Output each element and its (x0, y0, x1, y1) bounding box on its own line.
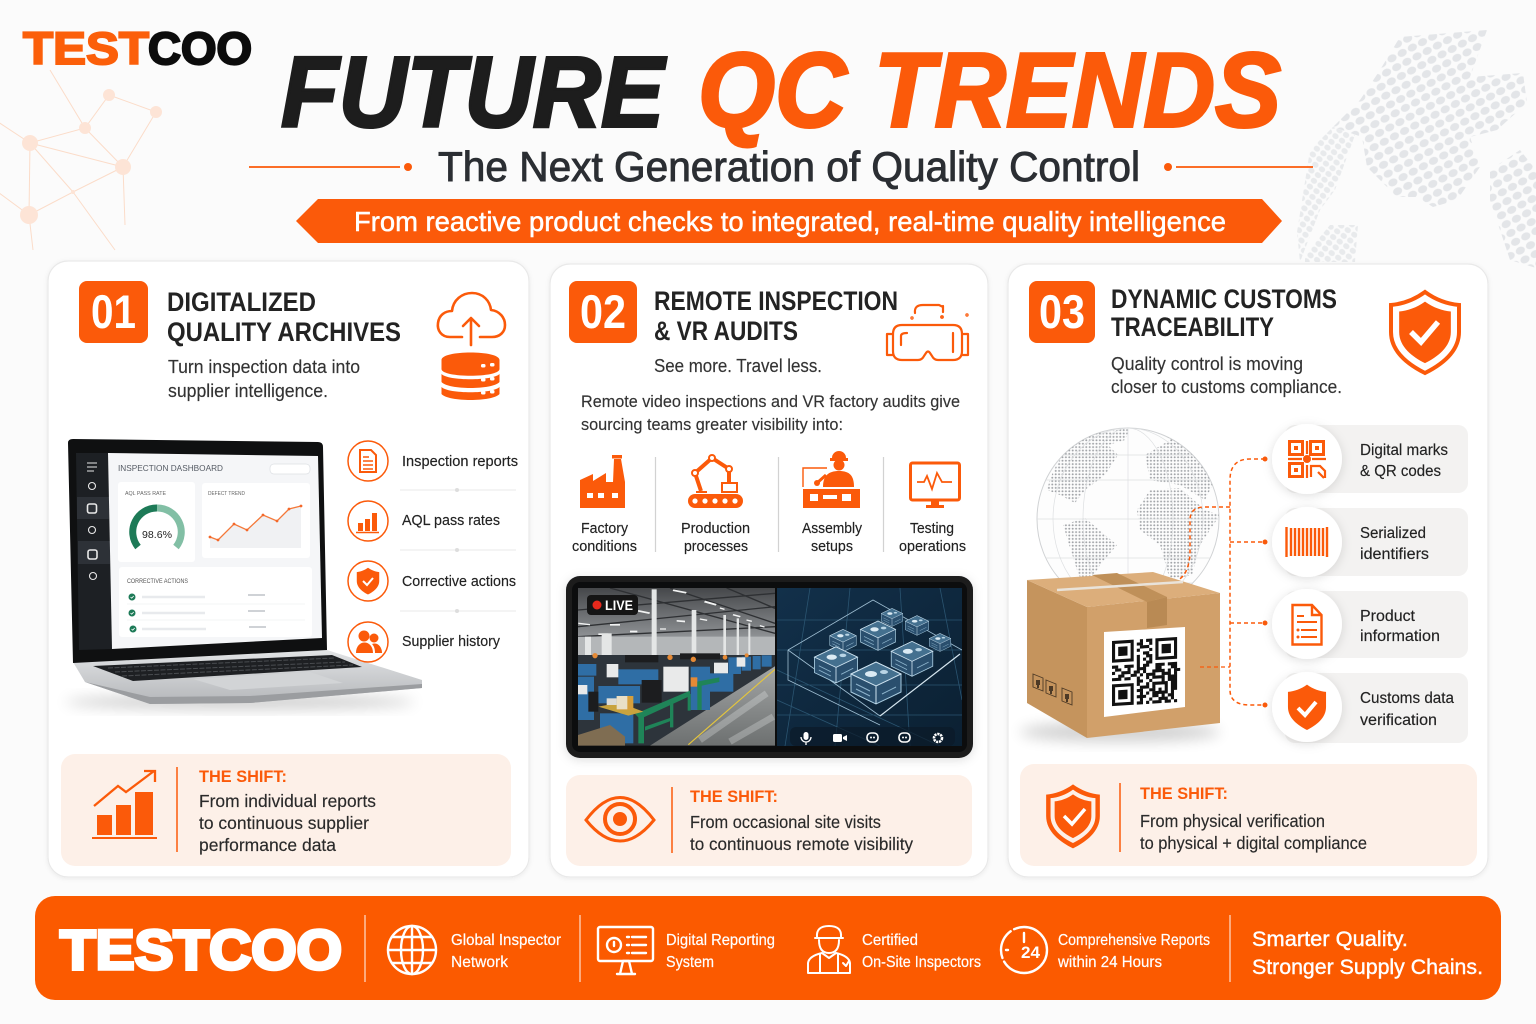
banner tagline (296, 199, 1282, 243)
logo: TEST (23, 23, 149, 74)
logo: COO (148, 23, 252, 74)
description: Quality control is moving (1111, 354, 1303, 374)
feature: digital marks and QR codes: & QR codes (1360, 463, 1441, 480)
tagline: See more. Travel less. (654, 356, 822, 376)
heading: TRACEABILITY (1111, 312, 1274, 342)
item: factory conditions: conditions (572, 539, 637, 555)
footer slogan (1252, 928, 1483, 979)
heading: REMOTE INSPECTION (654, 286, 898, 316)
footer item: 24 hour reports (1001, 927, 1210, 973)
heading: QUALITY ARCHIVES (167, 317, 401, 347)
item: testing operations: Testing (910, 521, 954, 537)
icon: database (442, 352, 500, 400)
item: factory conditions (572, 455, 637, 555)
shift callout 3: to physical + digital compliance (1140, 833, 1367, 853)
globe (1037, 428, 1220, 610)
feature: serialized identifiers: identifiers (1360, 546, 1429, 563)
feature: product information: information (1360, 628, 1440, 645)
live badge: LIVE (605, 598, 633, 613)
shift callout 1: performance data (199, 835, 336, 855)
QR code (1112, 638, 1180, 705)
feature: product information: Product (1360, 608, 1416, 625)
number badge 01 (79, 281, 148, 343)
laptop with inspection dashboard: INSPECTION DASHBOARD (118, 463, 223, 473)
panel: dynamic customs traceability (1008, 264, 1488, 877)
icon: VR headset (887, 305, 968, 360)
shift callout 1 (61, 754, 511, 866)
footer item: certified inspectors: Certified (862, 932, 918, 949)
shift callout 3: From physical verification (1140, 811, 1325, 831)
title: QC TRENDS (698, 32, 1281, 150)
intro paragraph: Remote video inspections and VR factory audits give (581, 392, 960, 411)
feature: customs data verification (1272, 672, 1468, 743)
icon: shield solid (1046, 784, 1100, 848)
item: assembly setups: setups (811, 539, 853, 555)
footer item: global network (388, 926, 562, 974)
live badge (587, 595, 638, 615)
checklist: AQL pass rates (348, 501, 500, 541)
banner tagline: From reactive product checks to integrated, real-time quality intelligence (354, 206, 1226, 237)
footer slogan: Smarter Quality. (1252, 928, 1408, 951)
description (1111, 354, 1342, 397)
checklist: inspection reports (348, 441, 518, 481)
panel: remote inspection and VR audits (550, 264, 988, 877)
feature: digital marks and QR codes (1272, 424, 1468, 494)
background globe pattern (1297, 30, 1536, 268)
description: closer to customs compliance. (1111, 377, 1342, 397)
checklist: inspection reports: Inspection reports (402, 454, 518, 470)
dashed connectors (1178, 459, 1265, 705)
footer item: digital reporting: Digital Reporting (666, 932, 775, 949)
laptop with inspection dashboard: 98.6% (142, 529, 172, 541)
item: production processes: Production (681, 521, 750, 537)
shift callout 3: THE SHIFT: (1140, 784, 1228, 803)
logo (23, 23, 252, 74)
number badge 03: 03 (1039, 285, 1085, 338)
gauge (133, 508, 181, 547)
item: production processes (681, 455, 750, 555)
heading: & VR AUDITS (654, 316, 798, 346)
checklist: corrective actions: Corrective actions (402, 574, 516, 590)
tablet video call (566, 576, 973, 758)
feature: customs data verification: verification (1360, 712, 1437, 729)
feature: serialized identifiers: Serialized (1360, 525, 1426, 542)
icon: eye (586, 798, 654, 841)
checklist: supplier history: Supplier history (402, 634, 501, 650)
footer item: digital reporting (598, 927, 775, 974)
title: FUTURE (281, 36, 667, 148)
feature: serialized identifiers (1272, 507, 1468, 577)
footer item: global network: Network (451, 954, 509, 971)
shift callout 1: to continuous supplier (199, 813, 369, 833)
cardboard box with QR label (1020, 572, 1230, 742)
shift callout 2: From occasional site visits (690, 812, 881, 832)
footer item: 24 hour reports: Comprehensive Reports (1058, 932, 1210, 949)
intro paragraph (581, 392, 960, 434)
description (168, 357, 360, 401)
subtitle: The Next Generation of Quality Control (438, 143, 1140, 190)
description: supplier intelligence. (168, 381, 328, 401)
item: assembly setups: Assembly (802, 521, 863, 537)
number badge 01: 01 (91, 285, 136, 338)
checklist: corrective actions (348, 561, 516, 601)
description: Turn inspection data into (168, 357, 360, 377)
item: testing operations: operations (899, 539, 966, 555)
checklist: AQL pass rates: AQL pass rates (402, 513, 500, 529)
feature: digital marks and QR codes: Digital marks (1360, 442, 1448, 459)
shift callout 2: THE SHIFT: (690, 787, 778, 806)
shift callout 2 (566, 775, 972, 866)
footer item: certified inspectors: On-Site Inspectors (862, 954, 981, 971)
shift callout 2: to continuous remote visibility (690, 834, 913, 854)
item: testing operations (899, 463, 966, 555)
background network pattern (0, 70, 162, 250)
item: factory conditions: Factory (581, 521, 629, 537)
number badge 02 (569, 281, 637, 343)
live factory feed (578, 588, 775, 746)
icon: shield (1391, 292, 1459, 373)
icon: cloud upload (438, 293, 505, 345)
icon: growth chart (92, 771, 157, 838)
sidebar icons (87, 463, 97, 580)
panel: digitalized quality archives (48, 261, 529, 877)
number badge 03 (1029, 281, 1095, 343)
footer item: 24 hour reports: 24 (1021, 943, 1041, 962)
footer item: global network: Global Inspector (451, 932, 562, 949)
checklist: supplier history (348, 622, 501, 662)
intro paragraph: sourcing teams greater visibility into: (581, 415, 843, 434)
call controls (801, 732, 942, 745)
heading: DIGITALIZED (167, 287, 316, 317)
item: production processes: processes (684, 539, 748, 555)
footer bar (35, 896, 1501, 1000)
footer slogan: Stronger Supply Chains. (1252, 956, 1483, 979)
footer item: digital reporting: System (666, 954, 714, 971)
footer item: certified inspectors (808, 926, 981, 973)
VR digital twin (777, 588, 962, 746)
heading (654, 286, 898, 346)
title (281, 32, 1281, 150)
trend chart (210, 506, 301, 548)
laptop with inspection dashboard: CORRECTIVE ACTIONS (127, 579, 188, 585)
laptop with inspection dashboard: AQL PASS RATE (125, 491, 166, 497)
footer logo: TESTCOO (60, 918, 342, 981)
heading (1111, 284, 1337, 342)
feature: product information (1272, 589, 1468, 659)
shift callout 1: From individual reports (199, 791, 376, 811)
heading: DYNAMIC CUSTOMS (1111, 284, 1337, 314)
item: assembly setups (802, 451, 863, 555)
number badge 02: 02 (580, 285, 626, 338)
subtitle (249, 143, 1313, 190)
footer item: 24 hour reports: within 24 Hours (1057, 954, 1162, 971)
heading (167, 287, 401, 347)
laptop with inspection dashboard (65, 439, 422, 709)
shift callout 3 (1020, 764, 1477, 866)
feature: customs data verification: Customs data (1360, 690, 1454, 707)
laptop with inspection dashboard: DEFECT TREND (208, 491, 245, 497)
shift callout 1: THE SHIFT: (199, 767, 287, 786)
